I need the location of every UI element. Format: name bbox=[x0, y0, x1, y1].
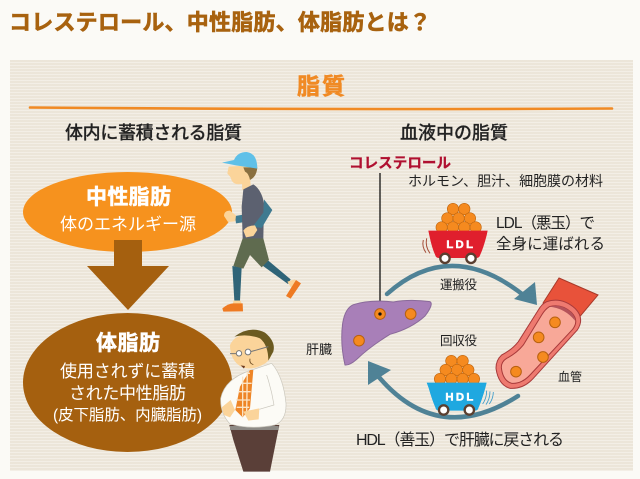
label: recovery role: 回収役 bbox=[440, 333, 477, 348]
text: LDL description: LDL（悪玉）で bbox=[496, 215, 595, 232]
text: roles of cholesterol: ホルモン、胆汁、細胞膜の材料 bbox=[408, 173, 603, 189]
heading: lipids: 脂質 bbox=[297, 73, 345, 99]
orange ellipse: neutral fat: 体のエネルギー源 bbox=[60, 215, 196, 234]
orange ellipse: neutral fat: 中性脂肪 bbox=[86, 186, 171, 209]
label: transport role: 運搬役 bbox=[440, 277, 477, 292]
label: cholesterol: コレステロール bbox=[349, 156, 452, 172]
icon: overweight man bbox=[221, 330, 286, 472]
icon: runner bbox=[222, 152, 301, 312]
cart: HDL: HDL bbox=[445, 391, 473, 403]
brown ellipse: body fat bbox=[23, 313, 232, 452]
brown ellipse: body fat: された中性脂肪 bbox=[69, 384, 186, 403]
heading underline bbox=[30, 108, 612, 109]
title: コレステロール、中性脂肪、体脂肪とは？ bbox=[9, 10, 431, 35]
cart: LDL: LDL bbox=[446, 239, 473, 251]
arrow: return bbox=[368, 361, 518, 417]
text: HDL description: HDL（善玉）で肝臓に戻される bbox=[356, 431, 564, 449]
left column heading: 体内に蓄積される脂質 bbox=[65, 123, 242, 143]
cart: HDL bbox=[427, 355, 493, 415]
label: blood vessel: 血管 bbox=[558, 369, 582, 384]
cart: LDL bbox=[423, 203, 488, 263]
brown ellipse: body fat: (皮下脂肪、内臓脂肪) bbox=[53, 406, 202, 424]
icon: liver bbox=[342, 300, 431, 365]
orange ellipse: neutral fat bbox=[23, 172, 232, 252]
brown ellipse: body fat: 体脂肪 bbox=[96, 332, 160, 355]
right column heading: 血液中の脂質 bbox=[400, 123, 508, 143]
arrow: carry out bbox=[387, 266, 537, 305]
brown ellipse: body fat: 使用されずに蓄積 bbox=[60, 361, 195, 381]
icon: blood vessel bbox=[496, 278, 598, 388]
label: liver: 肝臓 bbox=[306, 342, 332, 357]
text: LDL description bbox=[496, 215, 605, 253]
leader line bbox=[379, 173, 381, 314]
text: LDL description: 全身に運ばれる bbox=[496, 235, 605, 253]
arrow: down bbox=[87, 240, 169, 310]
